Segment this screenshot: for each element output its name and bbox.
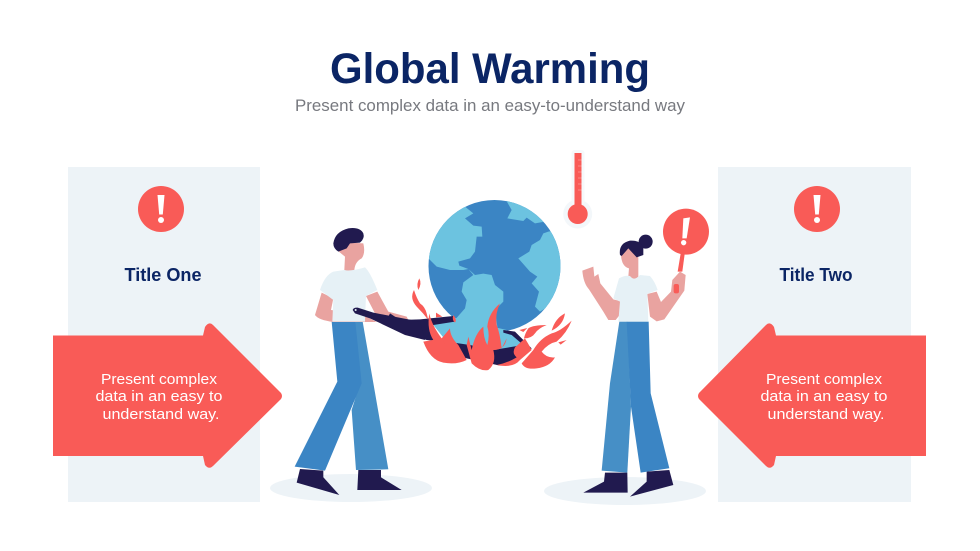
man arms bbox=[315, 292, 408, 322]
woman neck and face bbox=[621, 248, 638, 279]
subtitle: Present complex data in an easy-to-understand way bbox=[295, 96, 685, 115]
arrow: left callout bbox=[53, 323, 282, 468]
arrow: right callout bbox=[698, 323, 926, 468]
panel: right card bbox=[718, 167, 911, 502]
warning sign bbox=[663, 209, 709, 293]
icon: right warning bbox=[794, 186, 840, 232]
title: Global Warming bbox=[330, 45, 650, 93]
icon: thermometer bbox=[563, 150, 592, 228]
text: left callout: Present complex bbox=[101, 372, 218, 388]
illustration: man hand and pan handle bbox=[353, 308, 425, 340]
pan bbox=[387, 313, 532, 366]
man trousers bbox=[295, 322, 388, 471]
text: left callout: understand way. bbox=[102, 407, 220, 423]
man shirt bbox=[320, 267, 377, 322]
illustration: woman upper body bbox=[582, 209, 709, 322]
heading: title two: Title Two bbox=[780, 265, 852, 285]
man hair bbox=[333, 228, 364, 252]
illustration: man legs bbox=[295, 322, 402, 495]
woman shoes bbox=[583, 470, 673, 497]
woman shirt bbox=[613, 275, 658, 322]
icon: left warning bbox=[138, 186, 184, 232]
text: right callout: understand way. bbox=[768, 407, 884, 423]
illustration: woman legs bbox=[583, 322, 673, 497]
illustration: man upper body bbox=[315, 228, 408, 322]
man shoes bbox=[297, 469, 402, 495]
heading: title one: Title One bbox=[124, 265, 202, 285]
pan inside bbox=[433, 317, 525, 352]
flames bbox=[412, 278, 572, 370]
ground shadow: woman bbox=[544, 477, 706, 505]
woman trousers bbox=[602, 322, 669, 473]
panel: left card bbox=[68, 167, 260, 502]
text: left callout: data in an easy to bbox=[95, 389, 222, 405]
ground shadow: man bbox=[270, 474, 432, 502]
woman hair bbox=[620, 235, 653, 257]
text: right callout: data in an easy to bbox=[760, 389, 887, 405]
man neck and face bbox=[338, 243, 364, 271]
illustration: globe bbox=[428, 200, 560, 330]
illustration: pan and flames bbox=[387, 278, 572, 370]
text: right callout: Present complex bbox=[766, 372, 883, 388]
woman arms bbox=[582, 267, 686, 321]
